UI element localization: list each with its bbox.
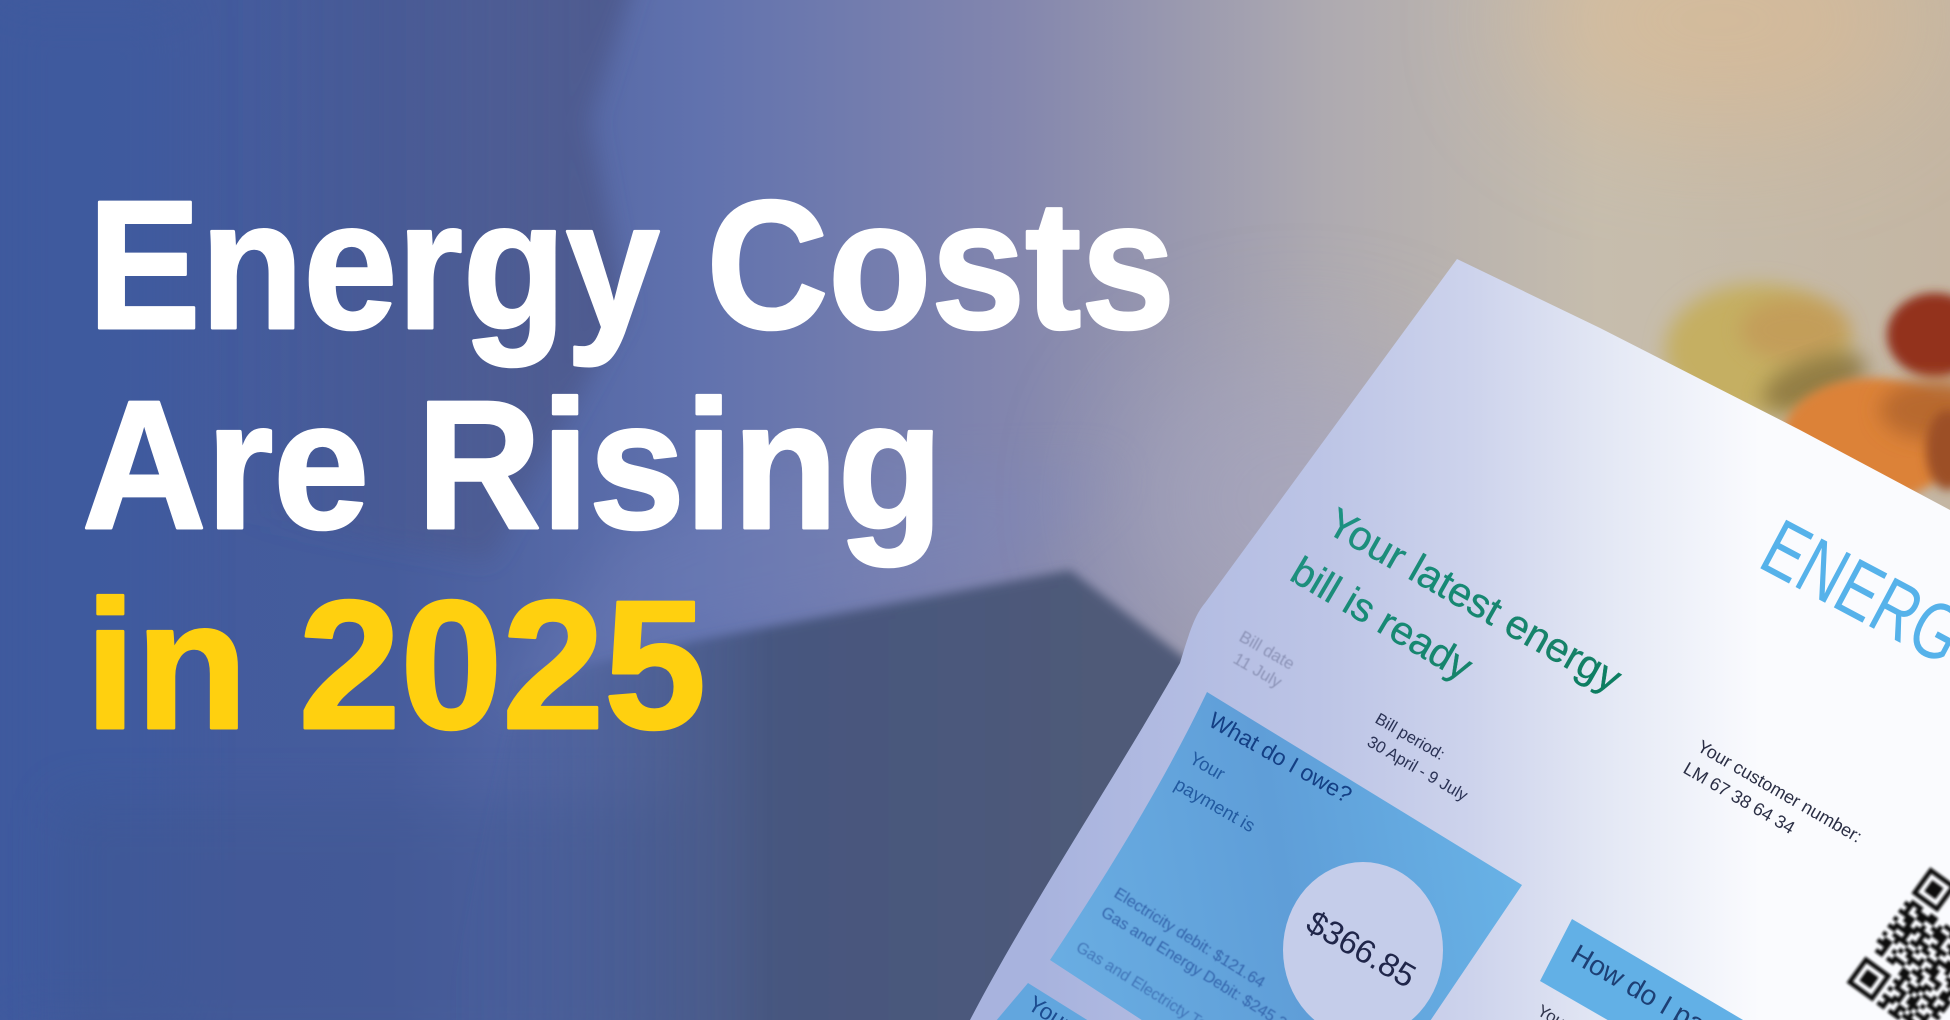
panel: how do I pay	[1540, 919, 1760, 1020]
payment label: Your	[1186, 747, 1229, 784]
bill heading: bill is ready	[1283, 549, 1480, 689]
owe heading: What do I owe?	[1205, 707, 1356, 808]
amount circle	[1283, 862, 1443, 1020]
amount owed: $366.85	[1300, 903, 1422, 995]
payment label	[1172, 751, 1254, 832]
panel: lower left box	[996, 983, 1087, 1020]
title line 1: Energy Costs	[88, 162, 1175, 367]
debit lines: Electricity debit: $121.64	[1111, 885, 1268, 992]
bill date	[1233, 630, 1294, 688]
bill date: Bill date	[1236, 627, 1298, 674]
title line 3: in 2025	[85, 562, 706, 767]
blurred tablet on table	[440, 570, 1200, 1020]
bill period: Bill period:	[1372, 710, 1448, 764]
blurred fruit bowl	[1665, 284, 1950, 502]
bill period: 30 April - 9 July	[1364, 733, 1471, 805]
energy bill paper	[950, 240, 1950, 1020]
payment label: payment is	[1171, 773, 1259, 836]
title line 2: Are Rising	[82, 362, 943, 567]
bill date: 11 July	[1230, 649, 1285, 692]
QR code	[1847, 867, 1950, 1020]
title	[82, 162, 1175, 767]
customer number: LM 67 38 64 34	[1680, 758, 1798, 838]
panel: what do I owe	[1050, 692, 1522, 1020]
bill heading: Your latest energy	[1320, 499, 1630, 702]
customer number: Your customer number:	[1694, 736, 1865, 847]
